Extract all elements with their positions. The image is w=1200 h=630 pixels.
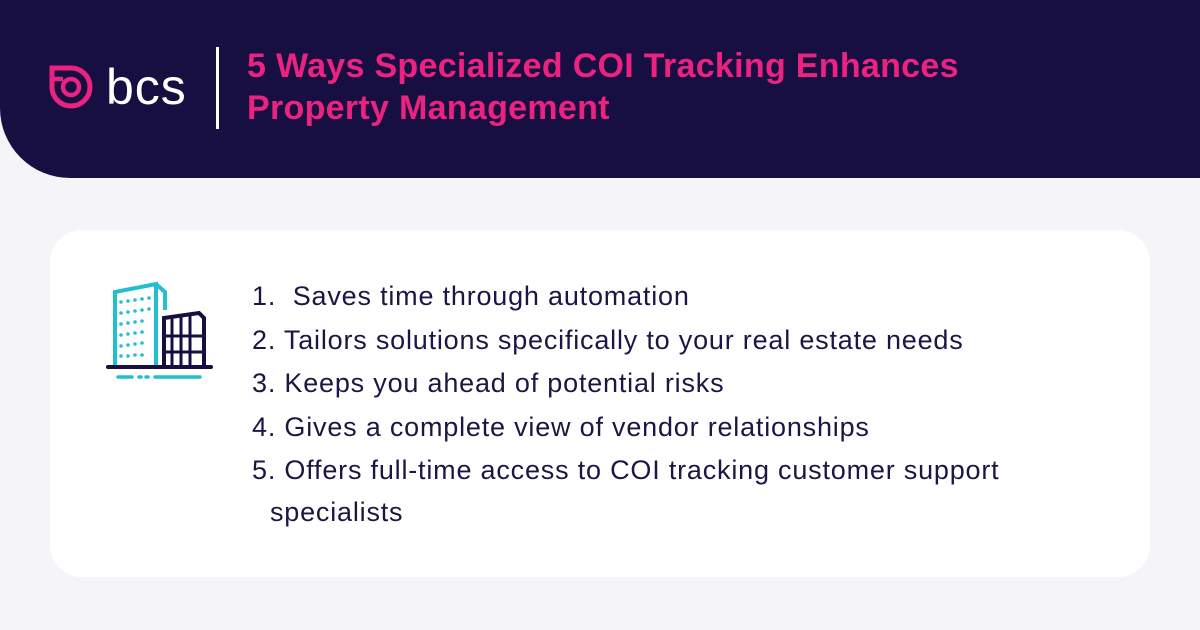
logo: bcs bbox=[50, 60, 187, 115]
icon: buildings bbox=[106, 282, 213, 379]
list of 5 ways: specialists bbox=[270, 497, 403, 527]
card panel bbox=[50, 230, 1150, 577]
list of 5 ways: 5. Offers full-time access to COI tracking customer support bbox=[252, 455, 999, 485]
list of 5 ways bbox=[252, 281, 999, 527]
divider bbox=[216, 47, 219, 129]
logo: bcs: bcs bbox=[106, 60, 187, 115]
list of 5 ways: 2. Tailors solutions specifically to your real estate needs bbox=[252, 325, 964, 355]
title: 5 Ways Specialized COI Tracking Enhances bbox=[247, 47, 959, 85]
list of 5 ways: 4. Gives a complete view of vendor relationships bbox=[252, 412, 870, 442]
title: Property Management bbox=[247, 89, 610, 127]
list of 5 ways: 1. Saves time through automation bbox=[252, 281, 690, 311]
title bbox=[247, 47, 959, 127]
header banner bbox=[0, 0, 1200, 178]
list of 5 ways: 3. Keeps you ahead of potential risks bbox=[252, 368, 724, 398]
